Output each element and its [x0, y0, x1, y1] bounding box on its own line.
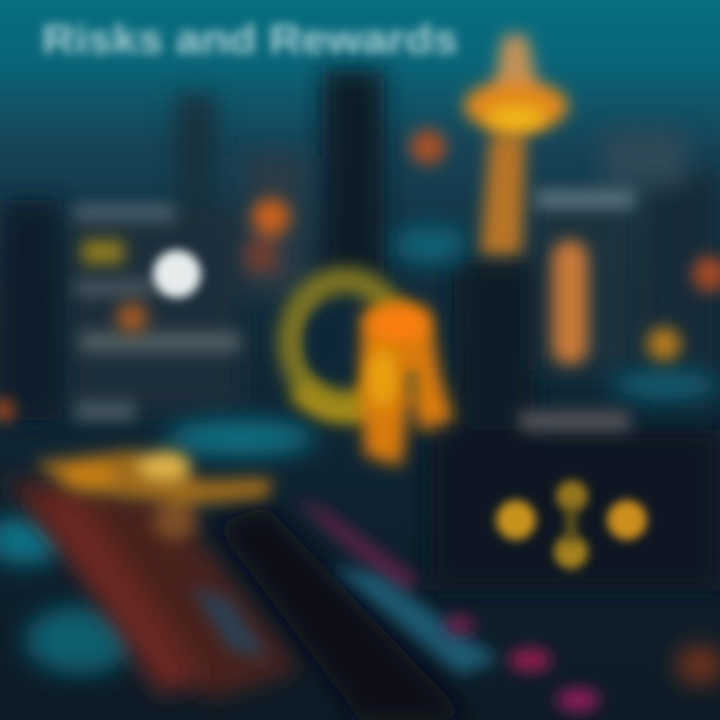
ring lower highlight — [298, 388, 378, 411]
dark skyline buildings — [0, 70, 720, 590]
tower — [464, 35, 568, 255]
title: Risks and Rewards — [42, 16, 458, 62]
ring centre — [307, 310, 347, 374]
tower shaft — [480, 135, 526, 255]
road: dark band and light trails — [0, 478, 720, 720]
dot bottom — [554, 535, 588, 569]
central ring and arrow emblem — [291, 280, 454, 466]
yellow light streak — [35, 450, 272, 540]
dot top — [556, 480, 588, 512]
arrow shape — [360, 301, 454, 466]
dot right — [607, 500, 647, 540]
panel: four glowing dots — [496, 480, 647, 569]
ring — [291, 280, 399, 404]
white light — [153, 250, 201, 298]
tower top — [494, 35, 538, 85]
tower disc — [464, 80, 568, 132]
orange glowing lights — [0, 129, 720, 421]
teal glow patches — [0, 227, 720, 674]
window light bands — [75, 190, 635, 430]
dot left — [496, 500, 536, 540]
